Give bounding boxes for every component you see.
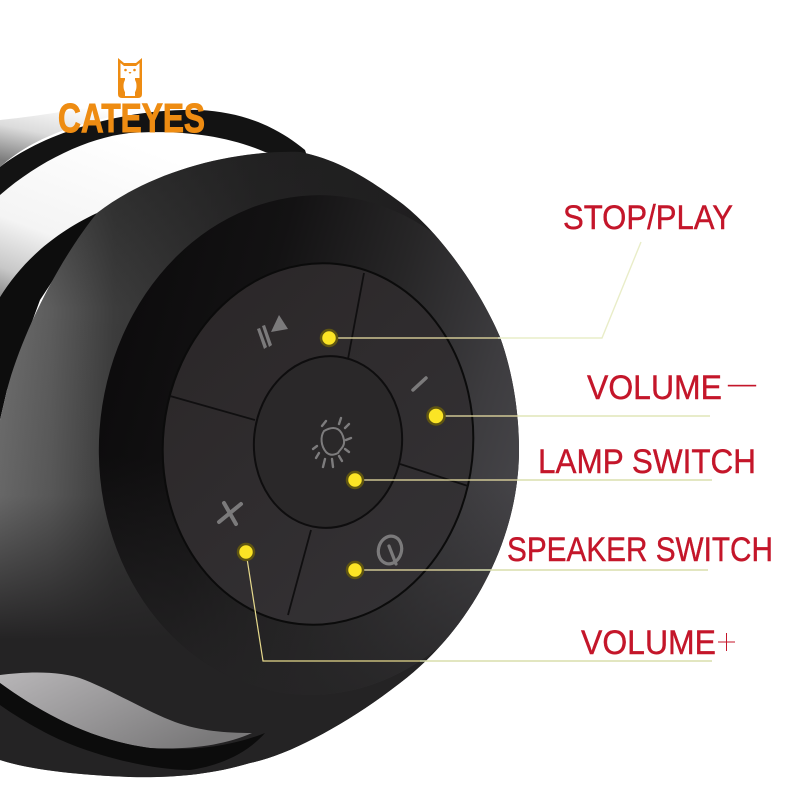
label: lamp switch: LAMP SWITCH — [538, 443, 756, 481]
icon: power — [375, 534, 405, 566]
labels — [507, 199, 773, 662]
label: stop/play: STOP/PLAY — [563, 199, 733, 237]
line: volume plus — [246, 552, 420, 661]
icon: lamp bulb — [313, 418, 351, 467]
black lower ring — [0, 683, 265, 770]
centre lamp button — [245, 349, 411, 535]
top ring — [0, 110, 310, 195]
dark gap — [0, 213, 97, 420]
inner rim — [98, 196, 519, 671]
dot: volume minus — [428, 408, 444, 424]
line: lamp switch outside — [517, 479, 712, 481]
speaker body — [0, 106, 548, 777]
outer disc — [0, 152, 519, 777]
wordmark: CATEYES — [58, 95, 205, 141]
icon: volume plus — [219, 503, 241, 524]
leader lines — [246, 242, 712, 661]
dot: stop/play — [321, 330, 337, 346]
upper housing — [0, 106, 120, 167]
disc shading — [0, 152, 519, 777]
button panel — [145, 248, 491, 640]
line: volume plus outside — [420, 660, 712, 662]
dot: speaker switch — [347, 562, 363, 578]
line: lamp switch — [355, 479, 517, 481]
line: stop/play — [329, 337, 498, 339]
label: volume minus: VOLUME — [587, 369, 722, 407]
panel disc — [145, 248, 491, 640]
white cavity — [0, 132, 265, 297]
line: speaker switch — [355, 569, 470, 571]
logo — [58, 58, 205, 141]
marker dots — [238, 330, 444, 578]
icon: stop/play — [257, 315, 288, 349]
grey gap wedge — [0, 673, 252, 748]
line: speaker switch outside — [470, 569, 708, 571]
icon: cat — [118, 58, 142, 98]
segment dividers — [170, 273, 468, 615]
line: volume minus outside — [518, 415, 710, 417]
label: volume plus: VOLUME — [581, 624, 716, 662]
dot: volume plus — [238, 544, 254, 560]
icon: volume minus — [413, 378, 426, 390]
minus sign — [728, 385, 756, 386]
line: volume minus — [436, 415, 518, 417]
plus sign — [718, 633, 735, 651]
dot: lamp switch — [347, 472, 363, 488]
line: stop/play outside — [498, 242, 641, 338]
